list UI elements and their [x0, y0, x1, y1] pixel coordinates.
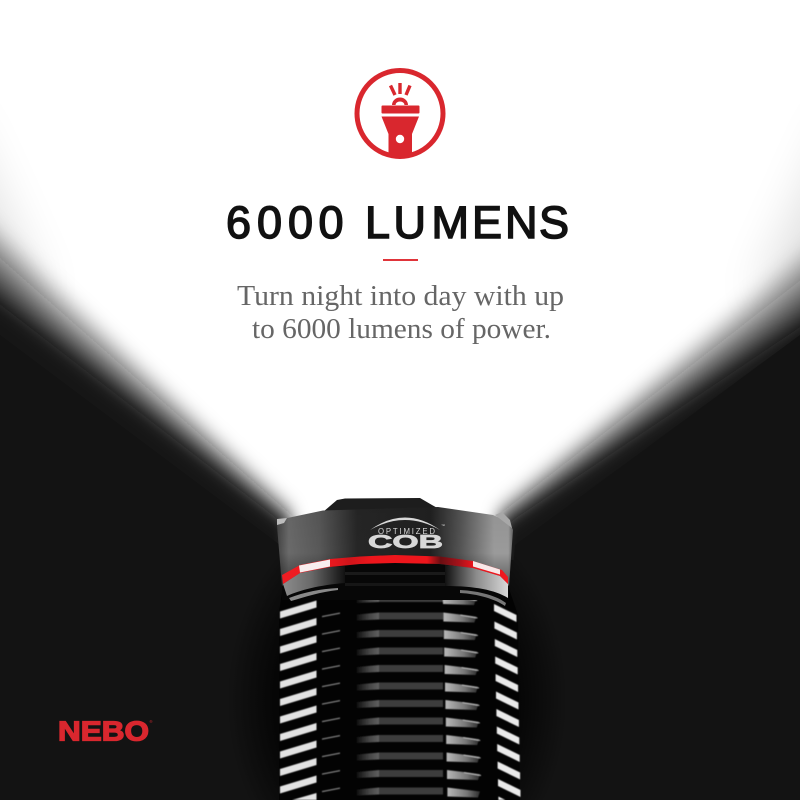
description text: to 6000 lumens of power.: [252, 314, 551, 345]
logo: NEBO: NEBO: [58, 716, 149, 746]
ring highlights: [299, 560, 330, 572]
red ring: [282, 555, 508, 584]
dark area right penumbra: [498, 227, 800, 800]
dark area solid core: [0, 335, 800, 800]
flashlight body: [279, 586, 520, 800]
beam edge vignette: [0, 90, 800, 300]
logo: NEBO: ®: [150, 719, 152, 724]
icon: flashlight in red circle: [357, 70, 443, 156]
logo: optimized cob: OPTIMIZED: [378, 527, 435, 536]
lens cap: [323, 498, 441, 512]
dark area left penumbra: [0, 201, 292, 800]
description text: [237, 281, 564, 345]
logo: optimized cob: COB: [368, 532, 443, 552]
description text: Turn night into day with up: [237, 281, 564, 312]
divider: [383, 259, 418, 261]
title: 6000 LUMENS: [226, 197, 569, 248]
dark halo around flashlight: [227, 520, 567, 800]
logo: optimized cob: [368, 518, 445, 552]
logo: optimized cob: ™: [441, 523, 445, 528]
body ridges: [280, 595, 520, 800]
collar center: [282, 562, 509, 600]
head bezel: [277, 507, 513, 586]
bezel tabs: [277, 518, 287, 525]
flashlight: [277, 498, 520, 800]
collar highlights: [283, 566, 345, 596]
